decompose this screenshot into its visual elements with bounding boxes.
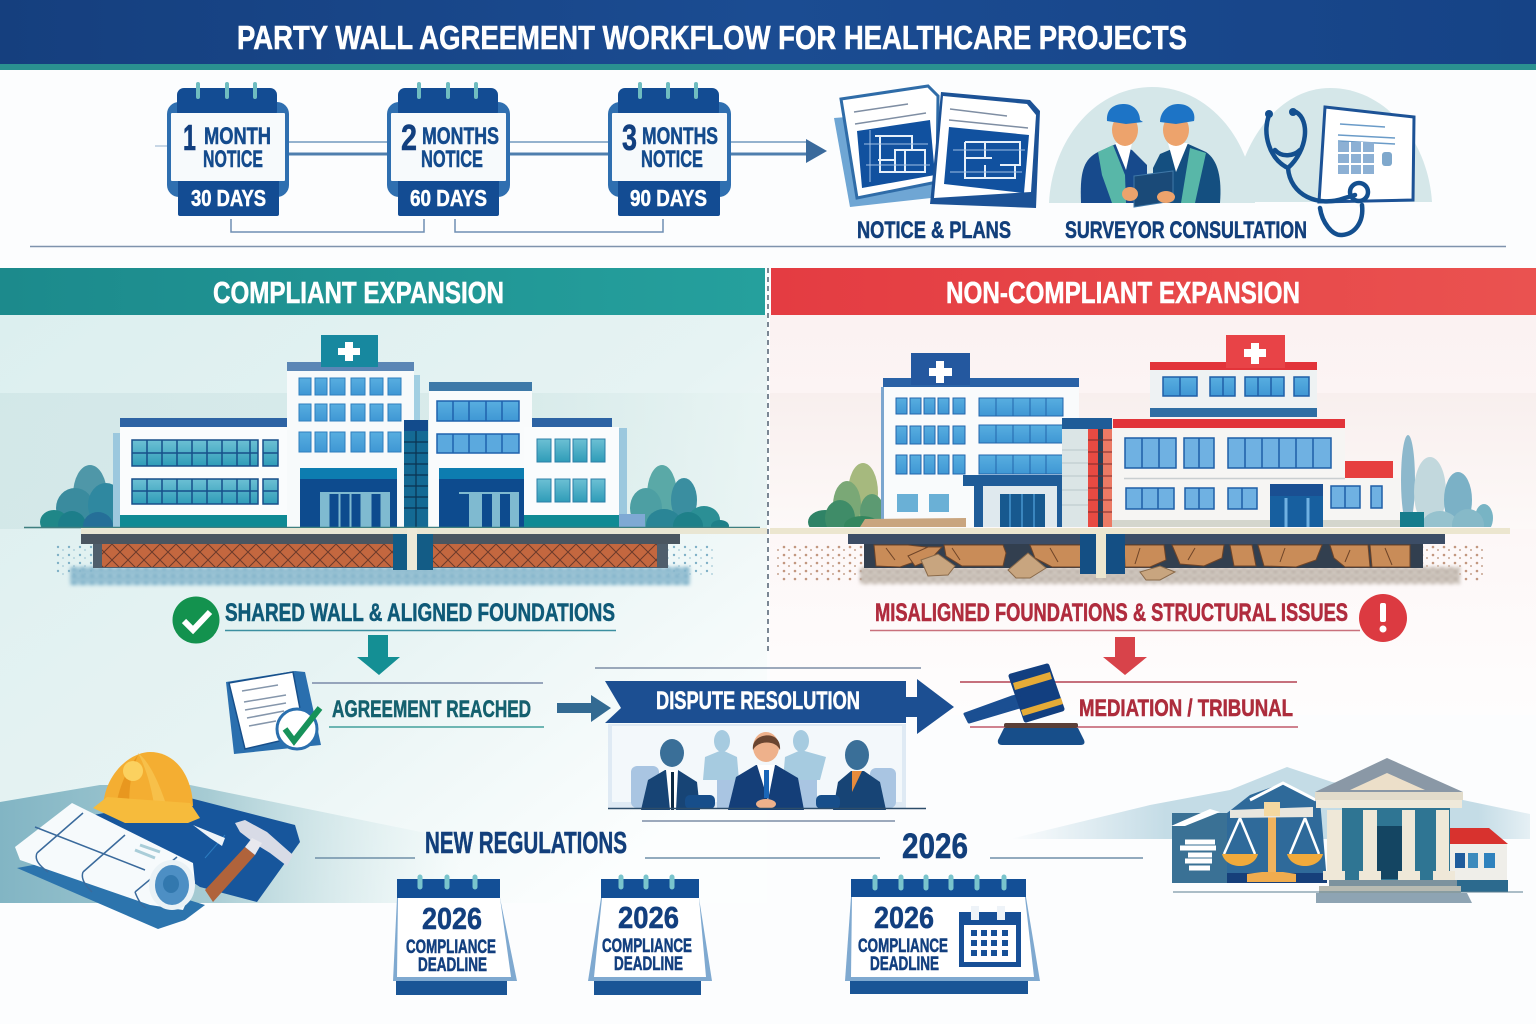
new regulations row [315, 825, 1143, 866]
calendar: 1 month notice: 30 DAYS [191, 185, 266, 211]
heading: new regulations: NEW REGULATIONS [425, 825, 627, 860]
rolled blueprint [15, 803, 195, 910]
agreement reached row [226, 671, 544, 754]
ground and foundation [24, 528, 767, 585]
icon: green check [172, 596, 220, 644]
icon: stethoscope and medical chart [1234, 88, 1432, 235]
calendar: compliance deadline 1: COMPLIANCE [406, 937, 496, 958]
calendar: 3 months notice: NOTICE [641, 146, 703, 173]
background figures [703, 730, 826, 780]
calendar: 2 months notice: 60 DAYS [410, 185, 487, 211]
hard hat [93, 752, 200, 823]
shared wall misaligned [1062, 418, 1112, 527]
icon: surveyors consulting [1049, 87, 1255, 207]
right expansion building [1112, 335, 1400, 527]
panel background: non-compliant side [770, 315, 1536, 715]
calendar: 3 months notice: MONTHS [642, 123, 718, 150]
heading: non-compliant expansion [771, 268, 1536, 315]
calendar: 2 months notice: NOTICE [421, 146, 483, 173]
title banner: PARTY WALL AGREEMENT WORKFLOW FOR HEALTHCARE PROJECTS [237, 19, 1187, 56]
person left [641, 739, 715, 810]
arrow: down to mediation [1103, 637, 1147, 675]
trees left [808, 463, 881, 527]
calendar: compliance deadline 2: 2026 [618, 900, 679, 935]
calendar: 3 months notice [608, 84, 731, 216]
hammer [205, 820, 293, 902]
dispute banner [605, 679, 954, 734]
title banner [0, 0, 1536, 70]
calendar: compliance deadline 2: DEADLINE [614, 954, 683, 975]
dispute resolution block [595, 668, 954, 821]
timeline divider [30, 246, 1506, 248]
icon: gavel [965, 666, 1084, 745]
dispute banner: DISPUTE RESOLUTION [656, 687, 860, 715]
calendar: compliance deadline 1 [393, 877, 517, 995]
connector lines between calendars [155, 142, 808, 232]
illustration: hard hat, blueprints and hammer [0, 752, 460, 929]
calendar: 2 months notice: MONTHS [422, 123, 499, 150]
surveyor left [1081, 104, 1147, 203]
label: shared wall and aligned foundations: SHARED WALL & ALIGNED FOUNDATIONS [225, 599, 615, 627]
person right [816, 740, 886, 810]
calendar: 1 month notice [167, 84, 289, 216]
house on right [1449, 828, 1508, 892]
label: surveyor consultation: SURVEYOR CONSULTATION [1065, 217, 1307, 244]
calendar: 3 months notice: 90 DAYS [630, 185, 707, 211]
left wing [113, 418, 300, 527]
rubble by building [860, 518, 966, 527]
icon: red alert [1359, 594, 1407, 642]
notice period timeline [155, 84, 827, 232]
calendar: compliance deadline 2: COMPLIANCE [602, 936, 692, 957]
illustration: courthouse and scales [1010, 758, 1530, 903]
scales of justice [1222, 802, 1323, 882]
heading: non-compliant expansion: NON-COMPLIANT EXPANSION [946, 275, 1300, 310]
calendar: compliance deadline 2 [588, 877, 712, 995]
agreement reached row: AGREEMENT REACHED [332, 696, 531, 723]
heading: compliant expansion [0, 268, 765, 315]
right block [429, 382, 532, 527]
mediation tribunal label: MEDIATION / TRIBUNAL [1079, 695, 1293, 722]
arrow: down to agreement [357, 635, 400, 675]
illustration: compliant hospital [24, 335, 767, 585]
right wing [524, 418, 645, 528]
mountains [1010, 767, 1530, 839]
court building [1315, 758, 1472, 903]
calendar: compliance deadline 1: 2026 [422, 901, 482, 936]
label: notice and plans: NOTICE & PLANS [857, 217, 1011, 244]
calendar: 1 month notice: MONTH [204, 123, 271, 150]
dashed centre divider [767, 268, 769, 655]
hill [0, 785, 460, 903]
trees right [630, 465, 729, 527]
icon: signed agreement [226, 671, 321, 754]
mediation panel with people [608, 724, 926, 810]
surveyor right [1153, 104, 1220, 203]
shadow of roll [17, 860, 205, 929]
calendar: compliance deadline 3: 2026 [874, 900, 934, 935]
middle block [1227, 783, 1327, 882]
illustration: non-compliant hospital [770, 335, 1510, 584]
calendar: 1 month notice: 1 [183, 117, 196, 158]
heading: 2026: 2026 [902, 827, 968, 866]
ground and cracked foundation [770, 528, 1510, 584]
arrow: agreement to dispute resolution [557, 695, 611, 722]
person centre [728, 732, 804, 810]
label: misaligned foundations and structural issues: MISALIGNED FOUNDATIONS & STRUCTURAL ISSUES [875, 599, 1348, 627]
entrance left [300, 468, 397, 527]
arrow to notice and plans [806, 139, 827, 163]
shared wall column [404, 420, 428, 527]
icon: small calendar [959, 906, 1021, 967]
calendar: compliance deadline 3 [845, 877, 1040, 994]
calendar: compliance deadline 3: COMPLIANCE [858, 936, 948, 957]
calendar: 2 months notice [387, 84, 510, 216]
panel background: compliant side [0, 315, 767, 903]
central tower [287, 335, 420, 527]
left original building [881, 353, 1079, 527]
trees left [40, 465, 113, 527]
calendar: 1 month notice: NOTICE [203, 146, 263, 173]
trees right [1400, 435, 1493, 527]
calendar: 2 months notice: 2 [401, 117, 417, 158]
heading: compliant expansion: COMPLIANT EXPANSION [213, 275, 504, 310]
left archive block [1171, 809, 1227, 883]
blueprint sheet [93, 798, 300, 902]
tablet [1134, 171, 1173, 207]
entrance [963, 475, 1074, 486]
calendar: compliance deadline 3: DEADLINE [870, 954, 939, 975]
calendar: 3 months notice: 3 [622, 117, 637, 158]
calendar: compliance deadline 1: DEADLINE [418, 955, 487, 976]
icon: notice and plans documents [834, 86, 1040, 208]
